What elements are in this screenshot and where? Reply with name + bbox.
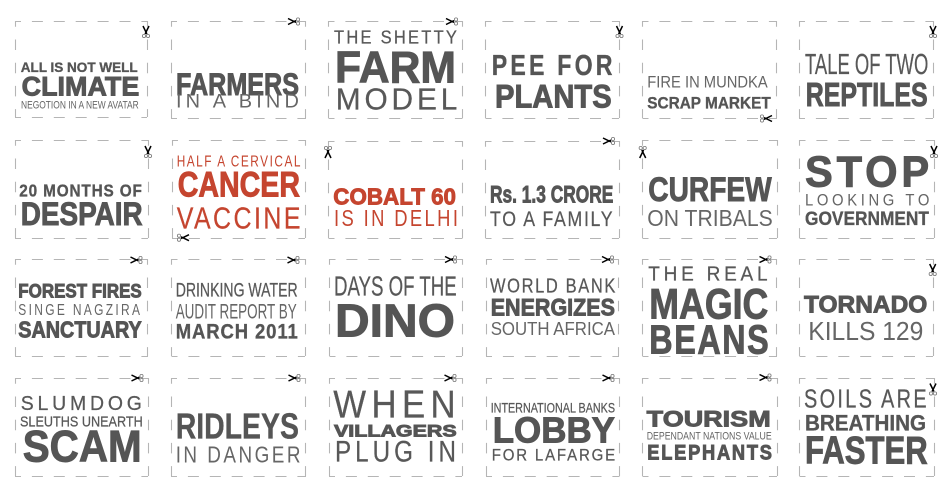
card: mundka fire: [642, 21, 777, 122]
headline: despair: 20 MONTHS OF: [19, 181, 143, 201]
card: farmers in a bind: [171, 18, 306, 118]
icon: scissors: [446, 18, 458, 25]
headline: climate: ALL IS NOT WELL: [21, 59, 138, 75]
headline: cobalt 60: [333, 183, 460, 231]
headline: lobby: FOR LAFARGE: [492, 447, 617, 465]
headline: scam: SCAM: [23, 423, 142, 472]
icon: scissors: [616, 26, 623, 38]
headline: stop: [805, 149, 933, 230]
card: rs 1.3 crore: [486, 137, 620, 238]
headline: lobby: INTERNATIONAL BANKS: [491, 401, 615, 416]
headline: farmers: FARMERS: [176, 66, 299, 102]
headline: plants: PEE FOR: [492, 50, 616, 82]
headline: energizes: ENERGIZES: [491, 295, 615, 322]
headline: ridleys: [176, 405, 303, 467]
headline: dino: DAYS OF THE: [334, 271, 457, 302]
headline: scam: SLEUTHS UNEARTH: [20, 415, 143, 431]
headline: despair: [19, 181, 143, 232]
headline: audit report: [176, 281, 299, 343]
card: pee for plants: [486, 21, 623, 118]
card: days of the dino: [330, 256, 462, 356]
card: magic beans: [642, 256, 777, 362]
headline: magic beans: THE REAL: [648, 264, 771, 286]
headline: cancer vaccine: CANCER: [178, 166, 300, 205]
headline: tornado: KILLS 129: [808, 316, 923, 346]
headline: villagers: [333, 383, 461, 469]
headline: stop: LOOKING TO: [805, 191, 933, 209]
headline: crore: Rs. 1.3 CRORE: [490, 182, 613, 208]
headline: stop: STOP: [805, 149, 933, 197]
card: villagers plug in: [329, 374, 462, 476]
icon: scissors: [288, 374, 300, 382]
headline: forest fires: [18, 281, 142, 342]
card: 20 months of despair: [15, 140, 152, 238]
card: cobalt 60: [324, 141, 462, 238]
card: ridleys in danger: [171, 374, 306, 476]
headline: curfew: CURFEW: [648, 171, 772, 209]
icon: scissors: [603, 137, 615, 145]
icon: scissors: [177, 234, 189, 241]
icon: scissors: [288, 18, 300, 25]
headline: tornado: TORNADO: [804, 292, 927, 318]
icon: scissors: [929, 384, 937, 395]
card: two reptiles: [799, 21, 937, 118]
headline: forest fires: SANCTUARY: [18, 316, 142, 342]
icon: scissors: [760, 374, 771, 381]
headline: audit report: MARCH 2011: [176, 320, 299, 343]
headline: plants: PLANTS: [495, 78, 612, 114]
icon: scissors: [142, 26, 150, 38]
headline: villagers: PLUG IN: [335, 436, 460, 469]
card: shetty farm model: [328, 18, 462, 118]
icon: scissors: [760, 115, 772, 122]
card: cervical cancer vaccine: [172, 140, 306, 241]
headline: dino: [334, 271, 457, 347]
headline: curfew: [647, 171, 773, 231]
headline: ridleys: IN DANGER: [176, 441, 303, 467]
headline: tornado: [804, 292, 927, 346]
icon: scissors: [130, 256, 142, 264]
headline: stop: GOVERNMENT: [805, 209, 929, 230]
icon: scissors: [445, 256, 457, 263]
headline: scam: [20, 393, 146, 472]
headline: farmers: IN A BIND: [176, 91, 303, 112]
headline: cancer vaccine: VACCINE: [177, 201, 303, 235]
card: climate negotiation: [15, 21, 150, 118]
headline: farm model: THE SHETTY: [334, 26, 459, 47]
headline: magic beans: MAGIC: [649, 280, 768, 327]
headline: dino: DINO: [335, 295, 455, 347]
headline: energizes: SOUTH AFRICA: [491, 318, 616, 339]
headline: cancer vaccine: [177, 154, 303, 235]
headline: cobalt 60: IS IN DELHI: [334, 205, 460, 231]
headline: magic beans: BEANS: [649, 316, 770, 362]
headline: scrap market: FIRE IN MUNDKA: [647, 73, 768, 92]
icon: scissors: [760, 256, 771, 263]
headline: faster: BREATHING: [805, 411, 926, 436]
headline: villagers: WHEN: [333, 383, 461, 426]
headline: farm model: [334, 26, 461, 116]
icon: scissors: [639, 146, 646, 158]
headline: tourism: [647, 407, 774, 464]
card: tourism elephants: [642, 374, 778, 476]
headline: scrap market: [647, 73, 771, 112]
card: lobby for lafarge: [486, 374, 620, 476]
headline: forest fires: SINGE NAGZIRA: [18, 302, 142, 319]
headline: tourism: ELEPHANTS: [647, 441, 774, 464]
card: forest fires: [15, 256, 148, 356]
headline: climate: CLIMATE: [22, 72, 139, 102]
icon: scissors: [324, 146, 332, 158]
headline: faster: [804, 386, 929, 472]
headline: magic beans: [648, 264, 771, 362]
headline: ridleys: RIDLEYS: [176, 405, 299, 446]
headline: curfew: ON TRIBALS: [647, 205, 773, 231]
headline: plants: [492, 50, 616, 114]
headline: scam: SLUMDOG: [21, 393, 146, 415]
headline: crore: TO A FAMILY: [490, 208, 614, 231]
card: tornado: [800, 259, 936, 356]
card: drinking water audit: [172, 256, 306, 356]
headline: tourism: TOURISM: [647, 407, 771, 432]
headline: despair: DESPAIR: [21, 196, 143, 232]
card: slumdog scam: [15, 374, 148, 476]
headline: cobalt 60: COBALT 60: [333, 183, 456, 209]
headline: farm model: MODEL: [336, 82, 461, 116]
card: soils breathing faster: [800, 378, 937, 476]
card: stop looking to government: [800, 140, 938, 238]
icon: scissors: [929, 26, 937, 38]
headline: farmers: [176, 66, 303, 112]
icon: scissors: [144, 146, 152, 158]
icon: scissors: [444, 374, 456, 382]
headline: audit report: AUDIT REPORT BY: [176, 300, 297, 323]
headline: energizes: WORLD BANK: [490, 275, 617, 297]
headline: villagers: VILLAGERS: [334, 422, 457, 441]
icon: scissors: [602, 374, 614, 382]
icon: scissors: [132, 374, 143, 382]
icon: scissors: [288, 256, 299, 264]
headline: crore: [490, 182, 614, 231]
card: curfew on tribals: [639, 140, 778, 238]
headline: climate: [21, 59, 139, 112]
icon: scissors: [930, 146, 938, 158]
card: world bank: [486, 256, 619, 356]
headline: energizes: [490, 275, 617, 339]
headline: cancer vaccine: HALF A CERVICAL: [177, 154, 302, 171]
headline: tourism: DEPENDANT NATIONS VALUE: [647, 430, 772, 442]
headline: climate: NEGOTION IN A NEW AVATAR: [21, 100, 139, 112]
headline: scrap market: SCRAP MARKET: [647, 93, 771, 112]
headline: reptiles: [805, 49, 928, 113]
headline: lobby: LOBBY: [493, 410, 615, 451]
icon: scissors: [929, 264, 936, 276]
headline: audit report: DRINKING WATER: [176, 281, 298, 302]
icon: scissors: [602, 256, 614, 263]
headline: farm model: FARM: [335, 43, 456, 92]
headline: forest fires: FOREST FIRES: [18, 281, 142, 302]
headline: lobby: [491, 401, 617, 465]
